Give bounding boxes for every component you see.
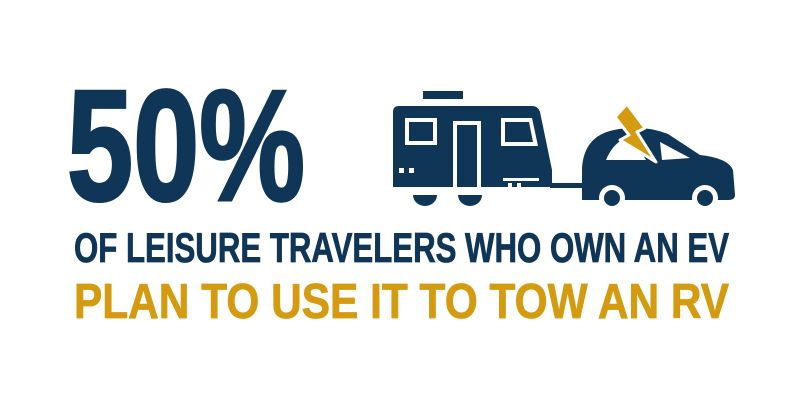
icon: RV trailer <box>393 91 586 206</box>
icon: electric car <box>582 104 735 211</box>
icon: lightning bolt <box>615 104 656 162</box>
stat: 50%: 50% <box>67 58 305 234</box>
